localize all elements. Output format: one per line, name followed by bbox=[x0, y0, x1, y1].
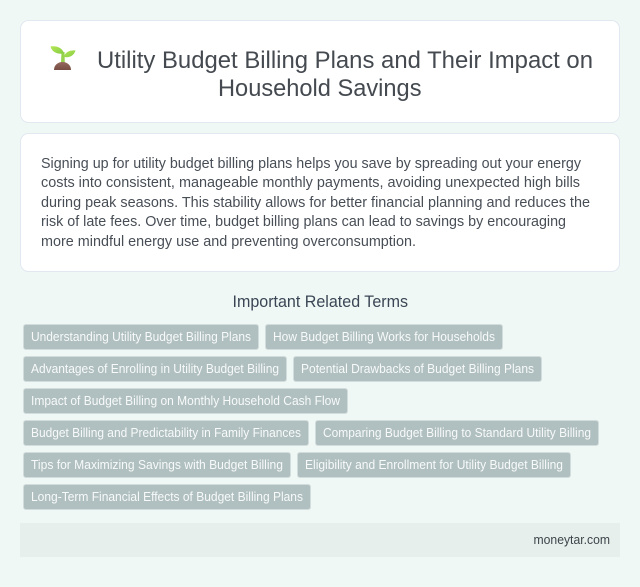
tag: Advantages of Enrolling in Utility Budget Billing bbox=[31, 362, 279, 376]
tag: Budget Billing and Predictability in Family Finances bbox=[31, 426, 301, 440]
text block: summary paragraph: risk of late fees. Over time, budget billing plans can lead to savings by encouraging bbox=[41, 213, 566, 230]
heading: title: Utility Budget Billing Plans and Their Impact on bbox=[97, 47, 593, 74]
tag: Tips for Maximizing Savings with Budget Billing bbox=[31, 458, 283, 472]
tag: Long-Term Financial Effects of Budget Billing Plans bbox=[31, 490, 303, 504]
tag bbox=[24, 388, 348, 414]
tag: Potential Drawbacks of Budget Billing Plans bbox=[301, 362, 534, 376]
tag bbox=[24, 356, 286, 382]
tag bbox=[24, 324, 258, 350]
tag list: related terms bbox=[24, 324, 598, 510]
heading: important related terms: Important Related Terms bbox=[232, 293, 408, 311]
tag bbox=[298, 452, 570, 478]
footer text: site name: moneytar.com bbox=[534, 533, 610, 547]
text block: summary paragraph: during peak seasons. This stability allows for better financial planning and reduces the bbox=[41, 194, 590, 211]
tag: Understanding Utility Budget Billing Plans bbox=[31, 330, 251, 344]
heading: title: Household Savings bbox=[218, 75, 422, 102]
tag bbox=[24, 452, 290, 478]
tag: Comparing Budget Billing to Standard Utility Billing bbox=[323, 426, 591, 440]
tag bbox=[294, 356, 542, 382]
tag bbox=[24, 420, 308, 446]
tag bbox=[266, 324, 502, 350]
tag: How Budget Billing Works for Households bbox=[273, 330, 495, 344]
text block: summary paragraph: costs into consistent, manageable monthly payments, avoiding unexpected high bills bbox=[41, 174, 580, 191]
heading: title bbox=[97, 47, 593, 102]
text block: summary paragraph bbox=[41, 155, 590, 250]
panel: title card bbox=[20, 20, 620, 122]
tag bbox=[24, 484, 310, 510]
footer bar bbox=[20, 523, 620, 557]
tag: Eligibility and Enrollment for Utility Budget Billing bbox=[305, 458, 563, 472]
text block: summary paragraph: more mindful energy use and preventing overconsumption. bbox=[41, 233, 416, 250]
panel: summary card bbox=[20, 134, 620, 272]
tag bbox=[316, 420, 598, 446]
icon: sprout bbox=[50, 46, 76, 70]
tag: Impact of Budget Billing on Monthly Household Cash Flow bbox=[31, 394, 341, 408]
text block: summary paragraph: Signing up for utility budget billing plans helps you save by spreading out your energy bbox=[41, 155, 581, 172]
